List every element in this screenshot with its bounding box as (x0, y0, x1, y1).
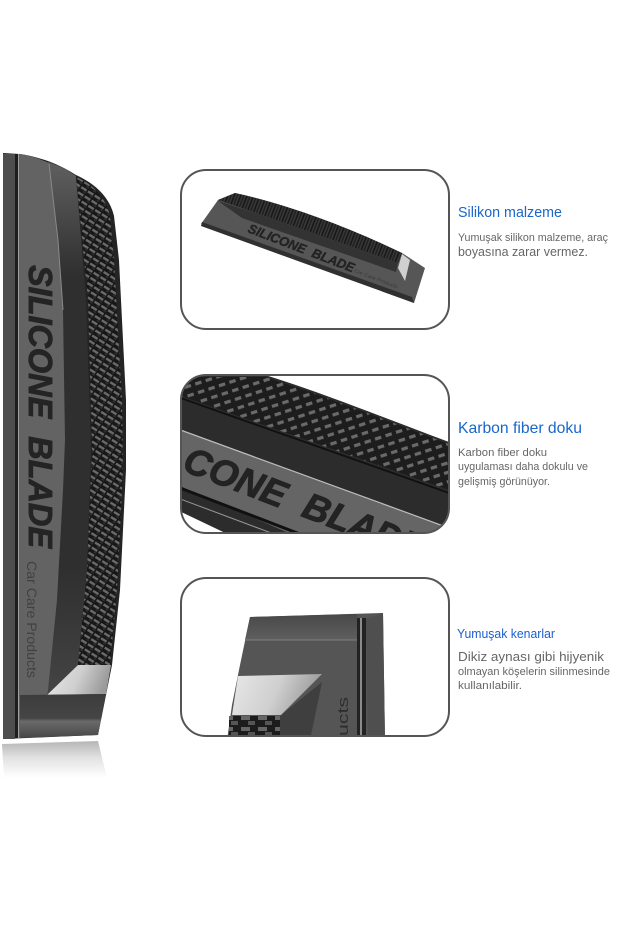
light face panel (20, 154, 65, 695)
silver corner (232, 674, 322, 715)
small blade lettering: SILICONE BLADE (246, 221, 357, 275)
text block: soft edges: olmayan köşelerin silinmesinde (458, 666, 610, 678)
close-up subtitle: ucts (335, 697, 352, 736)
text block: silicone material (458, 204, 608, 259)
close-up lettering: CONE BLADE (178, 439, 432, 569)
left strip (3, 154, 15, 739)
product image: large blade (2, 153, 126, 778)
panel: silicone material photo (181, 170, 449, 329)
text block: soft edges: Yumuşak kenarlar (457, 627, 555, 641)
text block: soft edges: Dikiz aynası gibi hijyenik (458, 649, 605, 664)
blade subtitle: Car Care Products (24, 561, 39, 678)
text block: carbon fibre texture: gelişmiş görünüyor. (458, 476, 550, 488)
small blade subtitle: Car Care Products (353, 268, 399, 291)
text block: silicone material: Yumuşak silikon malzeme, araç (458, 232, 608, 244)
text block: carbon fibre texture: Karbon fiber doku (458, 447, 547, 459)
blade lettering: SILICONE BLADE (22, 265, 59, 549)
text block: silicone material: boyasına zarar vermez. (458, 245, 588, 259)
panel highlight (49, 164, 63, 310)
bottom foot (20, 694, 106, 738)
blade reflection (2, 741, 107, 778)
text block: silicone material: Silikon malzeme (458, 204, 562, 221)
text block: carbon fibre texture (458, 420, 588, 488)
text block: soft edges (457, 627, 610, 692)
carbon corner (229, 716, 280, 735)
text block: carbon fibre texture: Karbon fiber doku (458, 420, 582, 437)
carbon fibre band (76, 177, 123, 665)
blade body (3, 153, 126, 739)
panel: carbon fibre close-up photo (180, 374, 450, 534)
mid face (20, 162, 91, 695)
text block: carbon fibre texture: uygulaması daha dokulu ve (458, 461, 588, 473)
small blade (201, 193, 425, 303)
silver corner (47, 665, 111, 695)
panel: soft edge close-up photo (181, 578, 449, 740)
text block: soft edges: kullanılabilir. (458, 680, 522, 692)
